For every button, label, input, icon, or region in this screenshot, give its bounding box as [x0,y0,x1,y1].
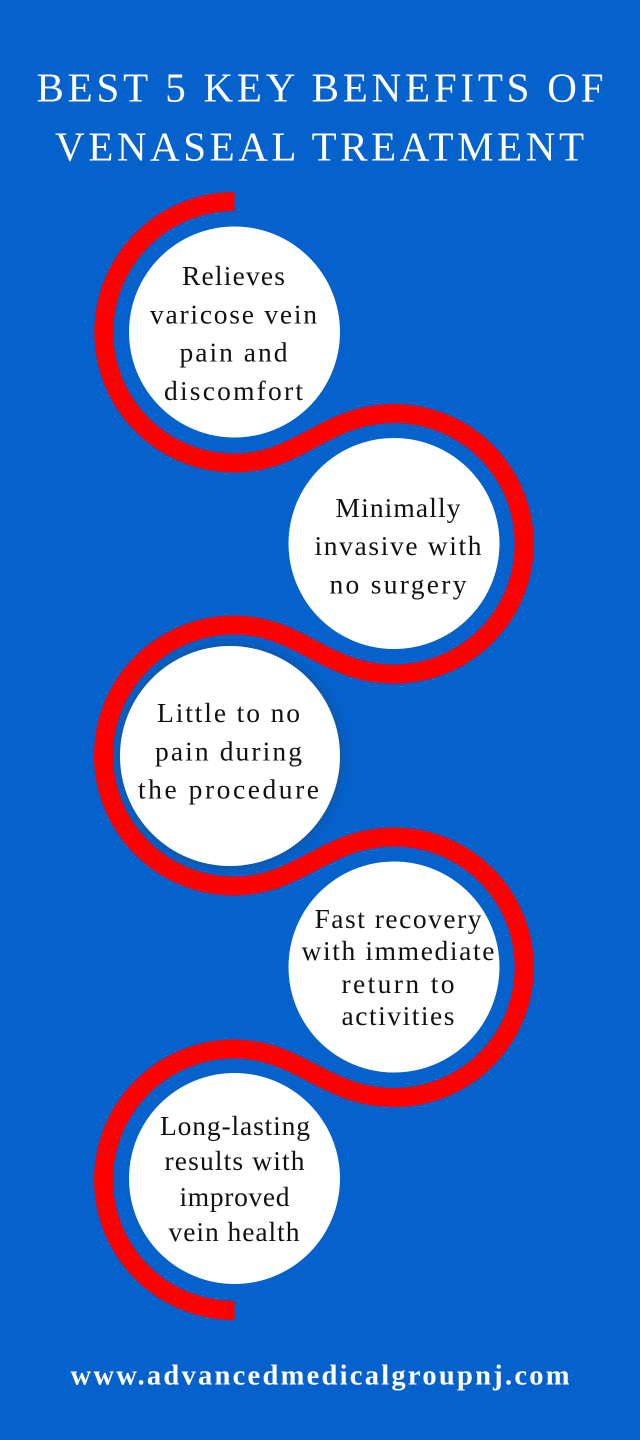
title: BEST 5 KEY BENEFITS OF [36,64,604,110]
title: VENASEAL TREATMENT [55,124,584,170]
benefit 1: pain and [180,336,288,368]
benefit 3: Little to no [157,697,300,728]
benefit 5 [129,1073,340,1284]
red winding ribbon [104,202,524,1311]
benefit 5: improved [180,1181,290,1212]
benefit 5: Long-lasting [160,1110,310,1141]
benefit 3: the procedure [138,774,319,804]
benefit 3: pain during [155,736,302,766]
benefit 2: invasive with [314,530,482,561]
benefit 3 [120,646,340,866]
benefit 2 [288,438,500,649]
benefit 4: with immediate [302,935,494,966]
benefit 1 [129,226,340,438]
website footer: www.advancedmedicalgroupnj.com [70,1360,570,1392]
benefit 2: Minimally [336,492,461,523]
benefit 4 [288,862,500,1072]
benefit 1: Relieves [182,260,285,291]
benefit 1: varicose vein [150,298,317,330]
benefit 2: no surgery [330,568,467,600]
benefit 5: vein health [168,1216,300,1247]
title [36,64,604,170]
benefit 4: return to [342,968,454,999]
benefit 4: activities [342,1000,454,1031]
benefit 1: discomfort [164,375,303,406]
benefit 4: Fast recovery [314,903,482,934]
benefit 5: results with [164,1145,305,1176]
